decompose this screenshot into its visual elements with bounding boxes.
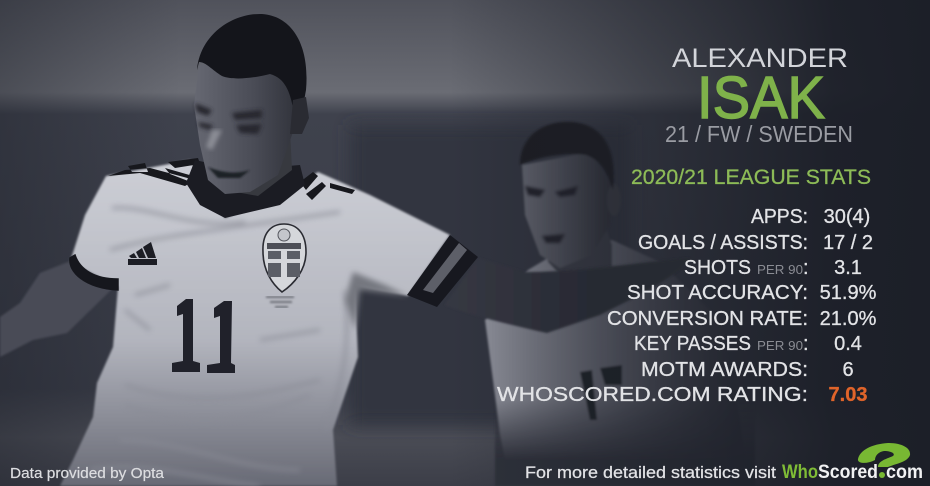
stat: apps: 30(4) (824, 206, 870, 228)
stat: shots per 90: 3.1 (834, 257, 862, 279)
neck (215, 130, 292, 196)
stat: goals and assists: GOALS / ASSISTS: (638, 232, 808, 254)
stat: conversion rate: 21.0% (820, 308, 877, 330)
left arm (0, 262, 113, 357)
icon: adidas logo (128, 242, 157, 265)
face (194, 55, 302, 194)
background player ear (607, 184, 621, 216)
stat: shots per 90: : (803, 257, 809, 279)
stat: shot accuracy: 51.9% (820, 282, 877, 304)
background player neck (545, 225, 612, 275)
footer promo: For more detailed statistics visit (525, 463, 776, 482)
icon: Sweden crest (263, 224, 306, 292)
stat: apps: APPS: (751, 206, 808, 228)
stat: apps (751, 206, 870, 228)
stat: key passes per 90: 0.4 (834, 333, 862, 355)
collar (186, 160, 305, 218)
right arm (445, 258, 690, 333)
background player eyes and mouth (525, 186, 578, 243)
player name (665, 43, 853, 147)
background player shirt (485, 240, 748, 486)
shirt number 11 (172, 299, 235, 373)
background player hair (520, 122, 614, 190)
stat: motm awards: 6 (842, 359, 854, 381)
stat: goals and assists: 17 / 2 (823, 232, 873, 254)
stat: shots per 90: PER 90 (757, 262, 803, 277)
stat: conversion rate: CONVERSION RATE: (607, 308, 808, 330)
background player shirt fade (495, 400, 755, 460)
surname: ISAK (697, 65, 825, 131)
background player number (580, 365, 622, 420)
stat: motm awards: MOTM AWARDS: (641, 359, 808, 381)
background player shirt lower (495, 460, 755, 486)
stat: shots per 90: SHOTS (684, 257, 751, 279)
hair (197, 14, 307, 112)
first name: ALEXANDER (672, 43, 848, 73)
stat: key passes per 90: KEY PASSES (634, 333, 751, 355)
left sleeve cuff (70, 255, 118, 290)
stat: shot accuracy: SHOT ACCURACY: (627, 282, 808, 304)
shirt (60, 160, 450, 486)
WhoScored logo: Scored (818, 462, 878, 483)
logo text: Who (782, 462, 818, 483)
stat: shots per 90 (684, 257, 862, 279)
stats heading: 2020/21 LEAGUE STATS (631, 166, 871, 189)
ear (290, 97, 309, 134)
age, position, nation: 21 / FW / SWEDEN (665, 121, 853, 147)
WhoScored logo: com (886, 462, 923, 483)
stat: key passes per 90: : (803, 333, 809, 355)
nose highlight (206, 130, 222, 150)
icon: question mark (858, 443, 910, 478)
sleeve underside shadow (345, 272, 408, 330)
data credit: Data provided by Opta (10, 466, 165, 482)
WhoScored logo (782, 443, 923, 483)
crest caption (266, 297, 294, 307)
main player (0, 14, 690, 486)
stat: whoscored rating: 7.03 (829, 384, 867, 406)
stat: key passes per 90: PER 90 (757, 338, 803, 353)
stat: whoscored rating: WHOSCORED.COM RATING: (497, 384, 808, 406)
right sleeve cuff (407, 235, 478, 307)
stats table (497, 206, 877, 406)
mouth (208, 167, 250, 178)
stat: key passes per 90 (634, 333, 862, 355)
brows and eyes (195, 103, 262, 134)
background player face (522, 152, 612, 268)
shoulder stripes (108, 158, 355, 200)
shirt folds (90, 208, 347, 486)
right side dark overlay (450, 0, 930, 486)
background player (485, 122, 755, 486)
